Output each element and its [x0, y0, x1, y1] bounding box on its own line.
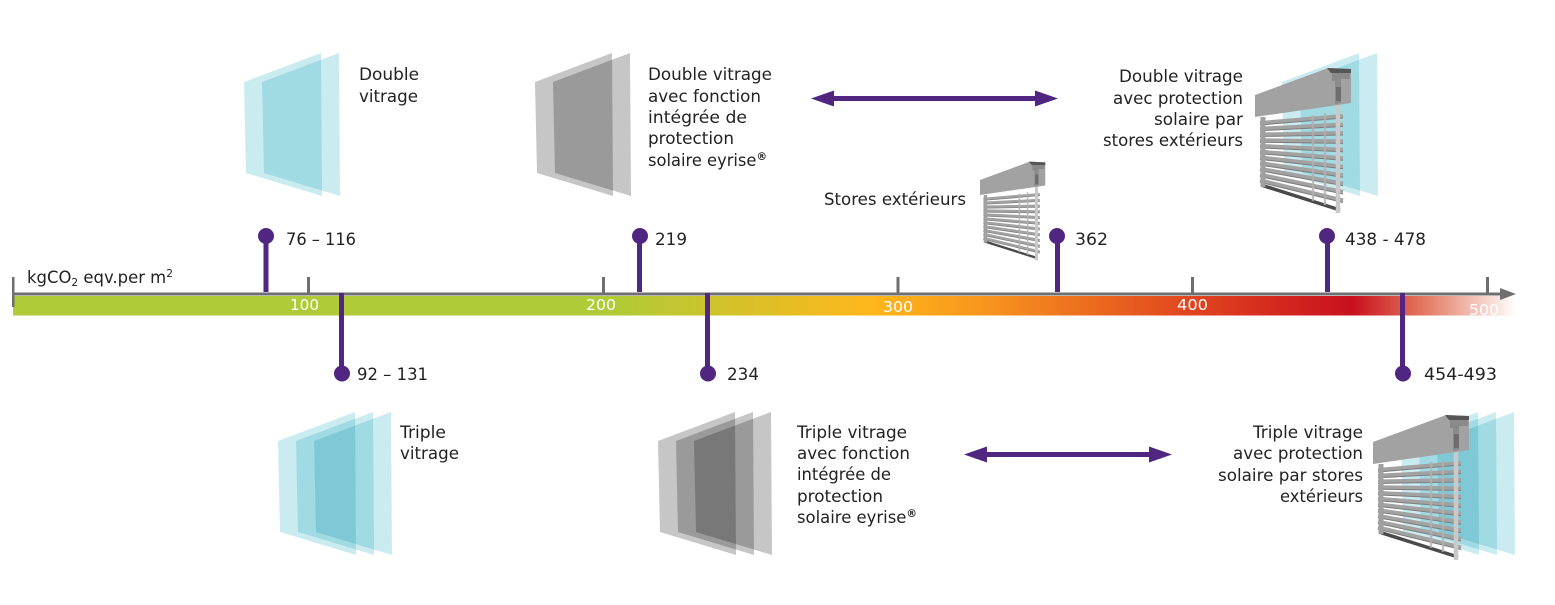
scale labels: 300 [883, 298, 913, 316]
text: triple glazing with blinds: solaire par stores [1218, 466, 1363, 486]
icon: double glazing with blinds [1255, 53, 1378, 213]
text: double glazing: Double [359, 65, 419, 85]
text: double glazing: vitrage [359, 87, 418, 107]
marker 76-116: 76 – 116 [286, 230, 356, 250]
text: triple glazing with blinds: avec protection [1233, 444, 1363, 464]
arrow: top double-headed [811, 90, 1058, 106]
text: triple glazing with eyrise: solaire eyrise [797, 508, 910, 528]
marker 362 [1049, 228, 1108, 292]
text: double glazing with blinds: Double vitrage [1119, 67, 1243, 87]
text: triple glazing with blinds [1218, 423, 1363, 507]
marker 454-493 [1395, 293, 1497, 385]
marker 76-116 [258, 228, 356, 292]
gradient scale bar [12, 277, 1516, 316]
text: double glazing with eyrise: Double vitrage [648, 65, 772, 85]
scale labels: 500 [1469, 301, 1499, 319]
icon: double glazing [244, 53, 340, 196]
scale labels: 100 [290, 296, 319, 314]
axis title: kgCO [27, 268, 73, 288]
text: triple glazing [399, 423, 459, 464]
text: double glazing with blinds: stores extérieurs [1103, 131, 1243, 151]
text: triple glazing: vitrage [400, 444, 459, 464]
marker 234 [700, 293, 759, 385]
text: triple glazing with eyrise: avec fonction [797, 444, 910, 464]
text: triple glazing with eyrise: intégrée de [797, 465, 891, 485]
text: triple glazing with blinds: extérieurs [1280, 487, 1363, 507]
scale labels [290, 296, 1499, 319]
text: double glazing with eyrise [648, 65, 772, 171]
text: double glazing [359, 65, 419, 107]
axis title: 2 [166, 267, 173, 280]
text: double glazing with eyrise: solaire eyrise [648, 151, 761, 171]
marker 219: 219 [655, 230, 687, 250]
text: triple glazing with eyrise [796, 423, 917, 528]
axis title: eqv.per m [78, 268, 166, 288]
marker 438-478 [1319, 228, 1426, 292]
text: double glazing with eyrise: ® [756, 150, 767, 163]
icon: triple glazing [278, 412, 392, 555]
icon: exterior blinds [980, 162, 1045, 260]
icon: double glazing with eyrise [535, 53, 631, 196]
text: double glazing with blinds: solaire par [1154, 110, 1243, 130]
icon: triple glazing with eyrise [658, 412, 772, 555]
marker 362: 362 [1075, 230, 1108, 250]
scale labels: 200 [586, 296, 616, 314]
marker 219 [632, 228, 687, 292]
marker 438-478: 438 - 478 [1345, 230, 1426, 250]
axis title: 2 [71, 276, 78, 289]
marker 234: 234 [727, 365, 759, 385]
text: triple glazing with eyrise: ® [906, 507, 917, 520]
marker 92-131: 92 – 131 [357, 365, 428, 385]
text: exterior blinds: Stores extérieurs [824, 190, 966, 210]
text: double glazing with blinds [1103, 67, 1243, 151]
icon: triple glazing with blinds [1373, 412, 1515, 560]
text: double glazing with blinds: avec protection [1113, 89, 1243, 109]
text: triple glazing with eyrise: Triple vitrage [796, 423, 907, 443]
text: triple glazing: Triple [399, 423, 446, 443]
text: double glazing with eyrise: intégrée de [648, 108, 747, 128]
text: double glazing with eyrise: avec fonction [648, 87, 761, 107]
axis with arrow [12, 277, 1516, 307]
marker 92-131 [334, 293, 428, 385]
text: double glazing with eyrise: protection [648, 129, 734, 149]
arrow: bottom double-headed [964, 446, 1172, 462]
marker 454-493: 454-493 [1424, 365, 1497, 385]
text: triple glazing with blinds: Triple vitrage [1252, 423, 1363, 443]
scale labels: 400 [1177, 296, 1208, 314]
text: triple glazing with eyrise: protection [797, 487, 883, 507]
